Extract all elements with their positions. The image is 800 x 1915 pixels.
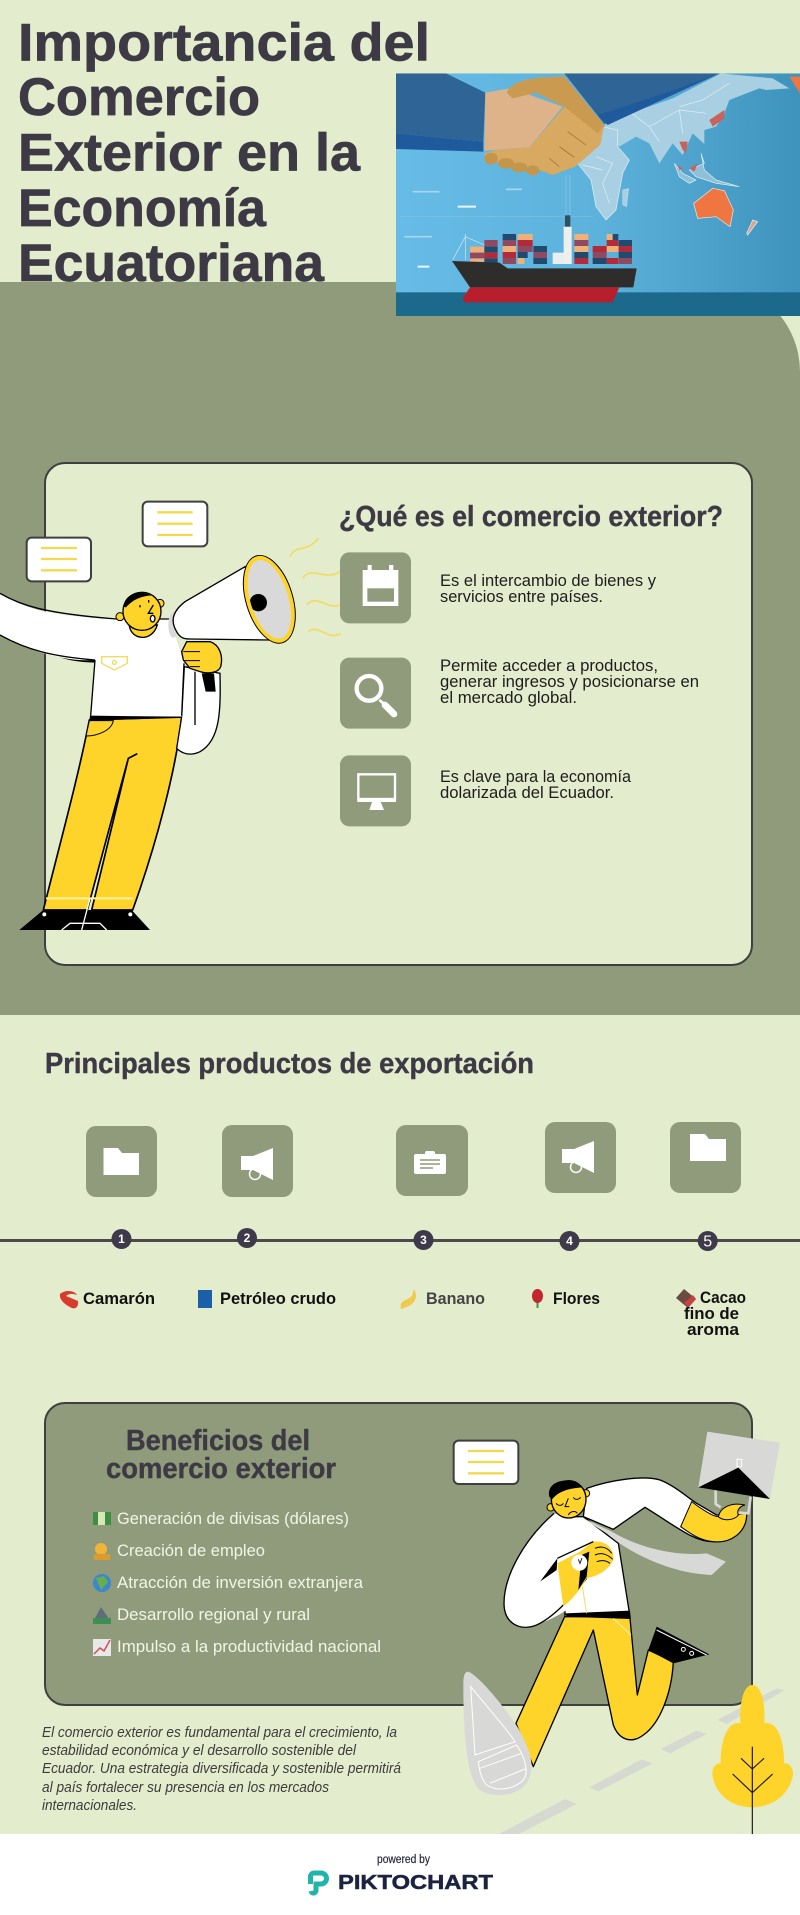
image: handshake over world map and cargo ship bbox=[396, 73, 800, 316]
product 5: cacao bbox=[670, 1122, 746, 1339]
number 2 bbox=[237, 1228, 257, 1248]
gripping hand bbox=[718, 1504, 745, 1520]
product 3: banano bbox=[396, 1125, 485, 1309]
text: bienes y servicios bbox=[440, 571, 656, 606]
emoji chocolate bbox=[676, 1289, 696, 1308]
torso and arm bbox=[0, 593, 184, 717]
emoji banana bbox=[401, 1289, 416, 1309]
conclusion text bbox=[42, 1725, 401, 1814]
icon: magnifier bbox=[340, 658, 411, 729]
benefit: empleo: Creación de empleo bbox=[117, 1541, 265, 1560]
note card lower bbox=[27, 538, 91, 581]
back shoe bbox=[648, 1627, 709, 1663]
label cacao: Cacao bbox=[700, 1288, 746, 1307]
label cacao: aroma bbox=[687, 1320, 740, 1339]
number 3: 3 bbox=[420, 1233, 427, 1247]
label petroleo: Petróleo crudo bbox=[220, 1289, 336, 1308]
title: Economía bbox=[18, 179, 267, 238]
title bbox=[18, 14, 430, 293]
head bbox=[547, 1480, 590, 1518]
trouser crease bbox=[613, 1618, 631, 1635]
tree bbox=[712, 1685, 793, 1834]
head bbox=[116, 592, 164, 637]
label flores: Flores bbox=[553, 1289, 600, 1308]
product 2: petroleo bbox=[198, 1125, 336, 1308]
footer bbox=[0, 1834, 800, 1915]
torso bbox=[563, 1517, 630, 1617]
benefit: desarrollo: Desarrollo regional y rural bbox=[117, 1605, 310, 1624]
icon: calendar bbox=[340, 552, 411, 623]
benefit: productividad: Impulso a la productividad nacional bbox=[117, 1637, 381, 1656]
heading: beneficios bbox=[106, 1425, 336, 1485]
left arm bbox=[504, 1513, 614, 1627]
road dashes bbox=[498, 1688, 785, 1834]
shoes bbox=[19, 898, 150, 930]
title: Importancia del bbox=[18, 14, 430, 73]
number 3 bbox=[414, 1230, 434, 1250]
heading: productos: Principales productos de exportación bbox=[45, 1048, 534, 1080]
number 1 bbox=[112, 1229, 132, 1249]
number 5: 5 bbox=[703, 1234, 712, 1250]
heading: que es: ¿Qué es el comercio exterior? bbox=[339, 501, 723, 533]
number 5 bbox=[698, 1231, 718, 1251]
text: permite acceder: generar ingresos y posicionarse en bbox=[440, 672, 699, 691]
timeline line bbox=[0, 1239, 800, 1242]
tile with folder icon bbox=[86, 1126, 157, 1197]
text: economia dolarizada: dolarizada del Ecuador. bbox=[440, 783, 614, 802]
conclusion text: al país fortalecer su presencia en los mercados bbox=[42, 1780, 329, 1796]
text: economia dolarizada bbox=[440, 767, 632, 802]
text: bienes y servicios: servicios entre países. bbox=[440, 587, 603, 606]
illustration: man with megaphone bbox=[0, 502, 341, 930]
title: Comercio bbox=[18, 68, 260, 127]
emoji rose bbox=[532, 1289, 543, 1308]
label camaron: Camarón bbox=[83, 1289, 155, 1308]
text: permite acceder bbox=[440, 656, 699, 707]
sound waves bbox=[290, 538, 341, 636]
text: economia dolarizada: Es clave para la economía bbox=[440, 767, 632, 786]
icon: monitor bbox=[340, 755, 411, 826]
tie bbox=[580, 1517, 726, 1575]
tile with clipboard icon bbox=[396, 1125, 468, 1196]
heading: beneficios: Beneficios del bbox=[126, 1425, 310, 1457]
tile with megaphone icon bbox=[545, 1122, 616, 1193]
illustration: running man bbox=[454, 1432, 793, 1834]
text: permite acceder: Permite acceder a productos, bbox=[440, 656, 658, 675]
note card upper bbox=[143, 502, 207, 546]
piktochart wordmark: PIKTOCHART bbox=[338, 1872, 493, 1894]
title: Exterior en la bbox=[18, 124, 361, 182]
number 1: 1 bbox=[118, 1232, 125, 1246]
sleeve of raised arm bbox=[177, 667, 220, 754]
label cacao: fino de bbox=[684, 1304, 739, 1323]
megaphone bbox=[168, 555, 296, 644]
text: permite acceder: el mercado global. bbox=[440, 688, 577, 707]
briefcase bbox=[698, 1432, 780, 1513]
number 2: 2 bbox=[244, 1231, 251, 1245]
emoji oil drum bbox=[198, 1290, 212, 1308]
title: Ecuatoriana bbox=[18, 234, 325, 293]
conclusion text: Ecuador. Una estrategia diversificada y sostenible permitirá bbox=[42, 1761, 401, 1777]
conclusion text: El comercio exterior es fundamental para el crecimiento, la bbox=[42, 1725, 397, 1741]
right arm bbox=[583, 1478, 747, 1542]
front shoe bbox=[463, 1672, 532, 1795]
heading: beneficios: comercio exterior bbox=[106, 1453, 336, 1485]
legs bbox=[516, 1616, 673, 1767]
label banano: Banano bbox=[426, 1289, 485, 1308]
note card bbox=[454, 1441, 518, 1484]
product 1: camaron bbox=[60, 1126, 157, 1308]
text: bienes y servicios: Es el intercambio de bienes y bbox=[440, 571, 656, 590]
piktochart logo mark bbox=[310, 1873, 327, 1893]
green background band bbox=[0, 282, 800, 1015]
tile with megaphone icon bbox=[222, 1125, 293, 1197]
conclusion text: internacionales. bbox=[42, 1798, 137, 1814]
emoji shrimp bbox=[60, 1291, 78, 1308]
product 4: flores bbox=[532, 1122, 616, 1308]
panel: que es el comercio exterior bbox=[45, 463, 752, 965]
trousers bbox=[43, 717, 182, 910]
benefit: inversion: Atracción de inversión extranjera bbox=[117, 1573, 364, 1592]
hand and handle bbox=[182, 642, 222, 692]
powered by: powered by bbox=[377, 1854, 430, 1866]
panel: beneficios bbox=[45, 1403, 752, 1705]
conclusion text: estabilidad económica y el desarrollo sostenible del bbox=[42, 1743, 357, 1759]
number 4: 4 bbox=[566, 1234, 573, 1248]
number 4 bbox=[560, 1231, 580, 1251]
benefit: divisas: Generación de divisas (dólares) bbox=[117, 1509, 349, 1528]
label cacao bbox=[684, 1288, 746, 1339]
tile with folder icon bbox=[670, 1122, 741, 1193]
shirt logo bbox=[102, 657, 127, 670]
